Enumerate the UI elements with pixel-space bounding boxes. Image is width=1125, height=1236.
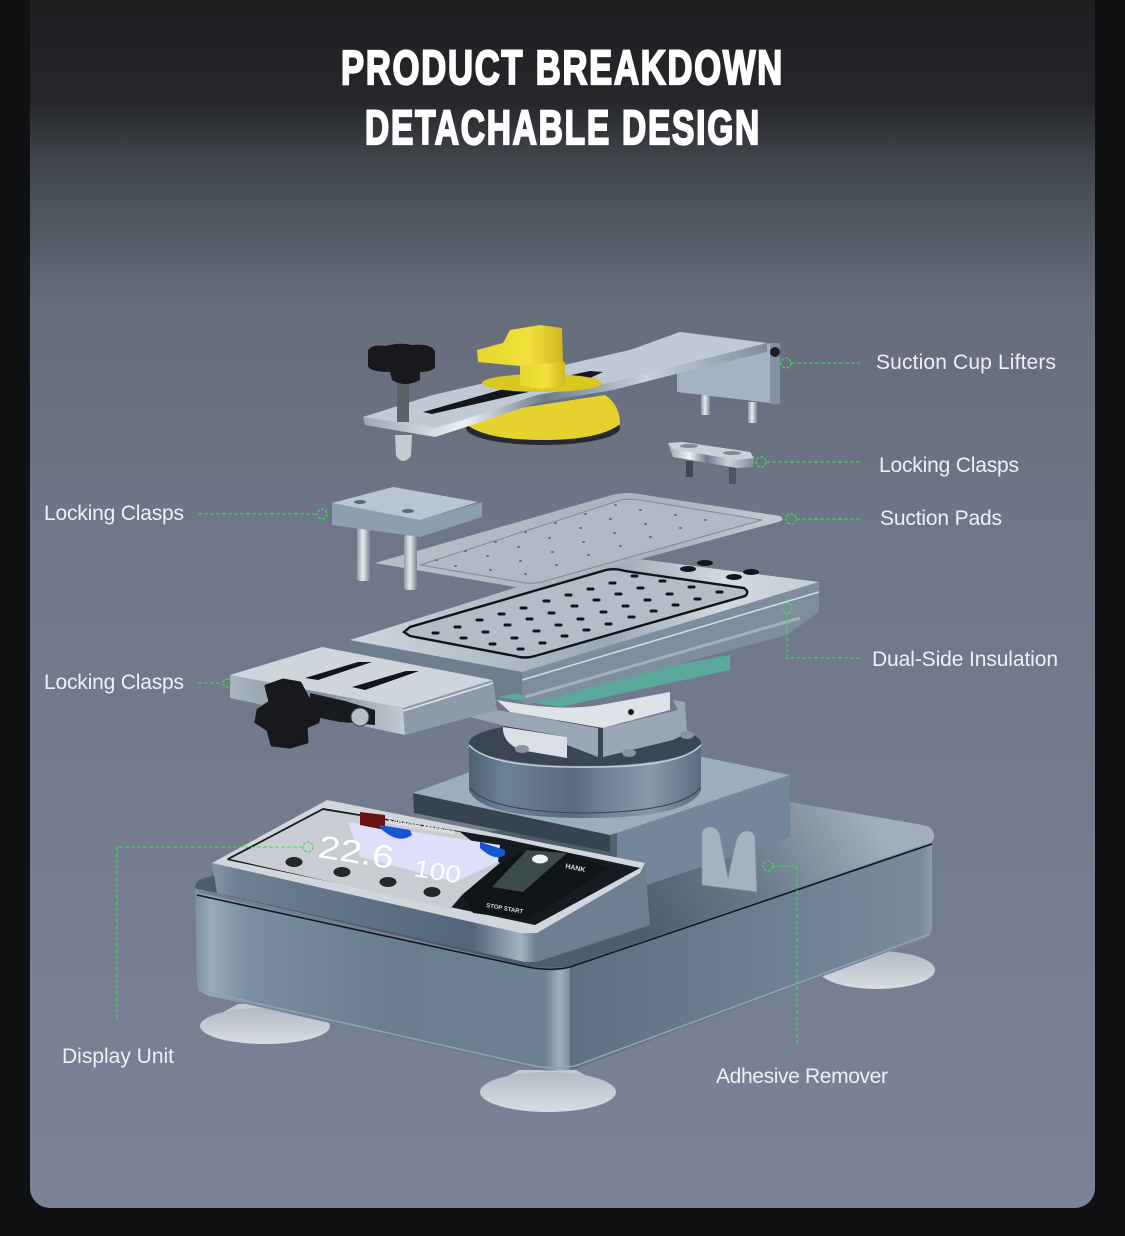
callout: display unit xyxy=(62,842,313,1068)
display unit: 100 xyxy=(412,855,463,889)
callout: display unit: Display Unit xyxy=(62,1045,174,1068)
suction pad xyxy=(375,493,783,588)
display unit: 22.6 xyxy=(316,828,397,876)
title: DETACHABLE DESIGN xyxy=(365,102,761,155)
callout: locking clasps upper left: Locking Clasps xyxy=(44,502,184,525)
suction feet xyxy=(200,951,935,1112)
stand prongs xyxy=(702,827,757,892)
callout: locking clasps upper left xyxy=(44,502,327,525)
display unit xyxy=(212,800,650,962)
display unit: STOP START xyxy=(486,903,524,916)
small locking clasp xyxy=(668,442,754,484)
title: PRODUCT BREAKDOWN xyxy=(341,42,784,95)
upper block clasp xyxy=(332,487,482,590)
callout: dual-side insulation xyxy=(782,603,1058,671)
callout: locking clasps right xyxy=(756,454,1019,477)
callout: locking clasps right: Locking Clasps xyxy=(879,454,1019,477)
callout: suction cup lifters xyxy=(781,351,1056,374)
display unit: HANK xyxy=(565,863,586,874)
product: exploded machine illustration xyxy=(195,325,935,1112)
callout: suction cup lifters: Suction Cup Lifters xyxy=(876,351,1056,374)
callout: locking clasps lower left: Locking Clasps xyxy=(44,671,184,694)
callout: adhesive remover xyxy=(716,861,888,1088)
callout: suction pads xyxy=(786,507,1002,530)
suction cup lifter xyxy=(363,325,780,461)
pedestal plate xyxy=(413,757,790,885)
callout: adhesive remover: Adhesive Remover xyxy=(716,1065,888,1088)
title xyxy=(341,42,784,155)
rotary stage xyxy=(470,692,694,758)
dual-side insulation plate xyxy=(350,556,819,705)
cylinder xyxy=(469,720,701,818)
teal glass xyxy=(497,655,730,707)
callout: suction pads: Suction Pads xyxy=(880,507,1002,530)
base unit xyxy=(195,802,934,1071)
lower locking clasp xyxy=(230,647,497,747)
display unit: Separate Machine xyxy=(387,816,456,837)
callout: dual-side insulation: Dual-Side Insulation xyxy=(872,648,1058,671)
